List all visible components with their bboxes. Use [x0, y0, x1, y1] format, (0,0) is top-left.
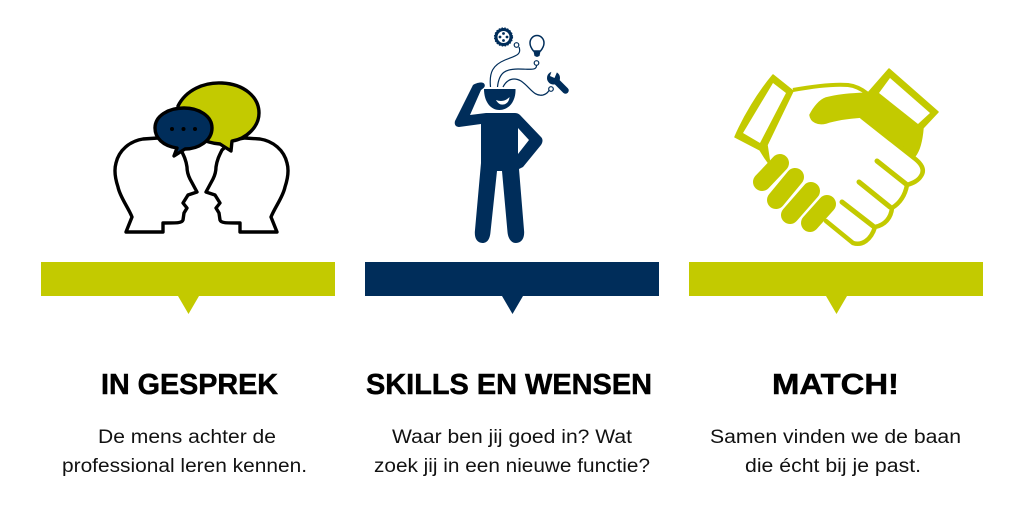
open head bowl	[484, 89, 516, 110]
text: column 3	[710, 427, 961, 477]
smile	[496, 97, 510, 105]
heading: in gesprek: IN GESPREK	[101, 369, 278, 401]
right hand finger outline	[826, 117, 923, 244]
icon: gear	[495, 28, 512, 46]
left cuff	[735, 75, 793, 165]
speech dots	[170, 127, 197, 131]
right cuff window	[879, 78, 930, 124]
finger separators	[842, 161, 906, 226]
icon: handshake	[735, 69, 938, 244]
icon: two heads in conversation	[115, 83, 288, 232]
navy speech bubble	[155, 108, 212, 156]
idea wires	[490, 43, 553, 95]
heading: match: MATCH!	[772, 369, 899, 401]
left hand fingers	[762, 163, 827, 223]
left cuff window	[743, 83, 786, 143]
heading: skills en wensen: SKILLS EN WENSEN	[366, 369, 652, 401]
text: column 2: zoek jij in een nieuwe functie?	[374, 456, 650, 477]
right cuff and thumb	[810, 69, 938, 156]
text: column 3: die écht bij je past.	[745, 456, 921, 477]
text: column 1: professional leren kennen.	[62, 456, 307, 477]
icon: person with ideas	[455, 28, 566, 243]
right head	[206, 138, 288, 232]
text: column 3: Samen vinden we de baan	[710, 427, 961, 448]
person silhouette	[455, 83, 542, 243]
text: column 2: Waar ben jij goed in? Wat	[392, 427, 633, 448]
text: column 1: De mens achter de	[98, 427, 276, 448]
banner: olive left	[41, 262, 335, 314]
icon: wrench	[547, 70, 566, 90]
banner: navy center	[365, 262, 659, 314]
banner: olive right	[689, 262, 983, 314]
icon: light bulb	[530, 36, 544, 57]
left head	[115, 138, 197, 232]
text: column 1	[62, 427, 307, 477]
text: column 2	[374, 427, 650, 477]
olive speech bubble	[178, 83, 259, 151]
top of hand outline	[793, 85, 868, 94]
